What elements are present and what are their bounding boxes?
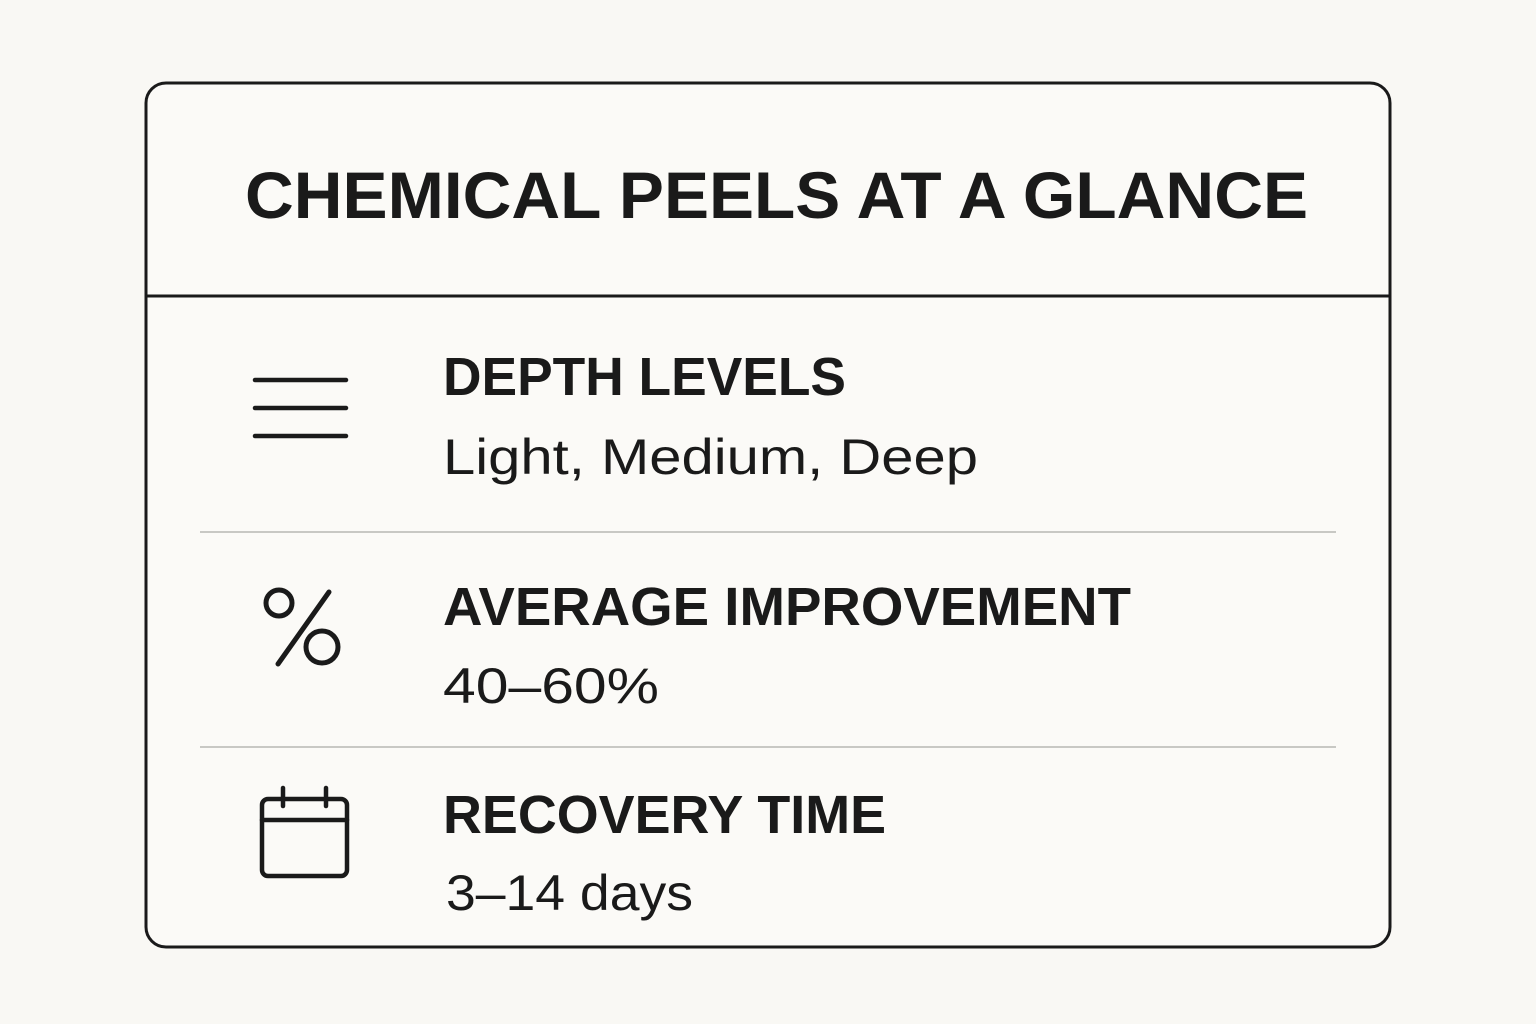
row: average improvement: 40–60% bbox=[443, 658, 659, 714]
row: recovery time: RECOVERY TIME bbox=[443, 785, 886, 845]
row: average improvement bbox=[443, 577, 1131, 714]
row: depth levels: DEPTH LEVELS bbox=[443, 347, 846, 407]
row: depth levels bbox=[443, 347, 978, 485]
icon: percent bbox=[266, 590, 338, 664]
icon: calendar bbox=[262, 788, 347, 876]
row: depth levels: Light, Medium, Deep bbox=[443, 429, 978, 485]
row: recovery time: 3–14 days bbox=[446, 865, 693, 921]
panel: card bbox=[146, 83, 1390, 947]
row: recovery time bbox=[443, 785, 886, 921]
row: average improvement: AVERAGE IMPROVEMENT bbox=[443, 577, 1131, 637]
title: CHEMICAL PEELS AT A GLANCE bbox=[245, 158, 1308, 232]
icon: depth lines bbox=[255, 380, 346, 436]
